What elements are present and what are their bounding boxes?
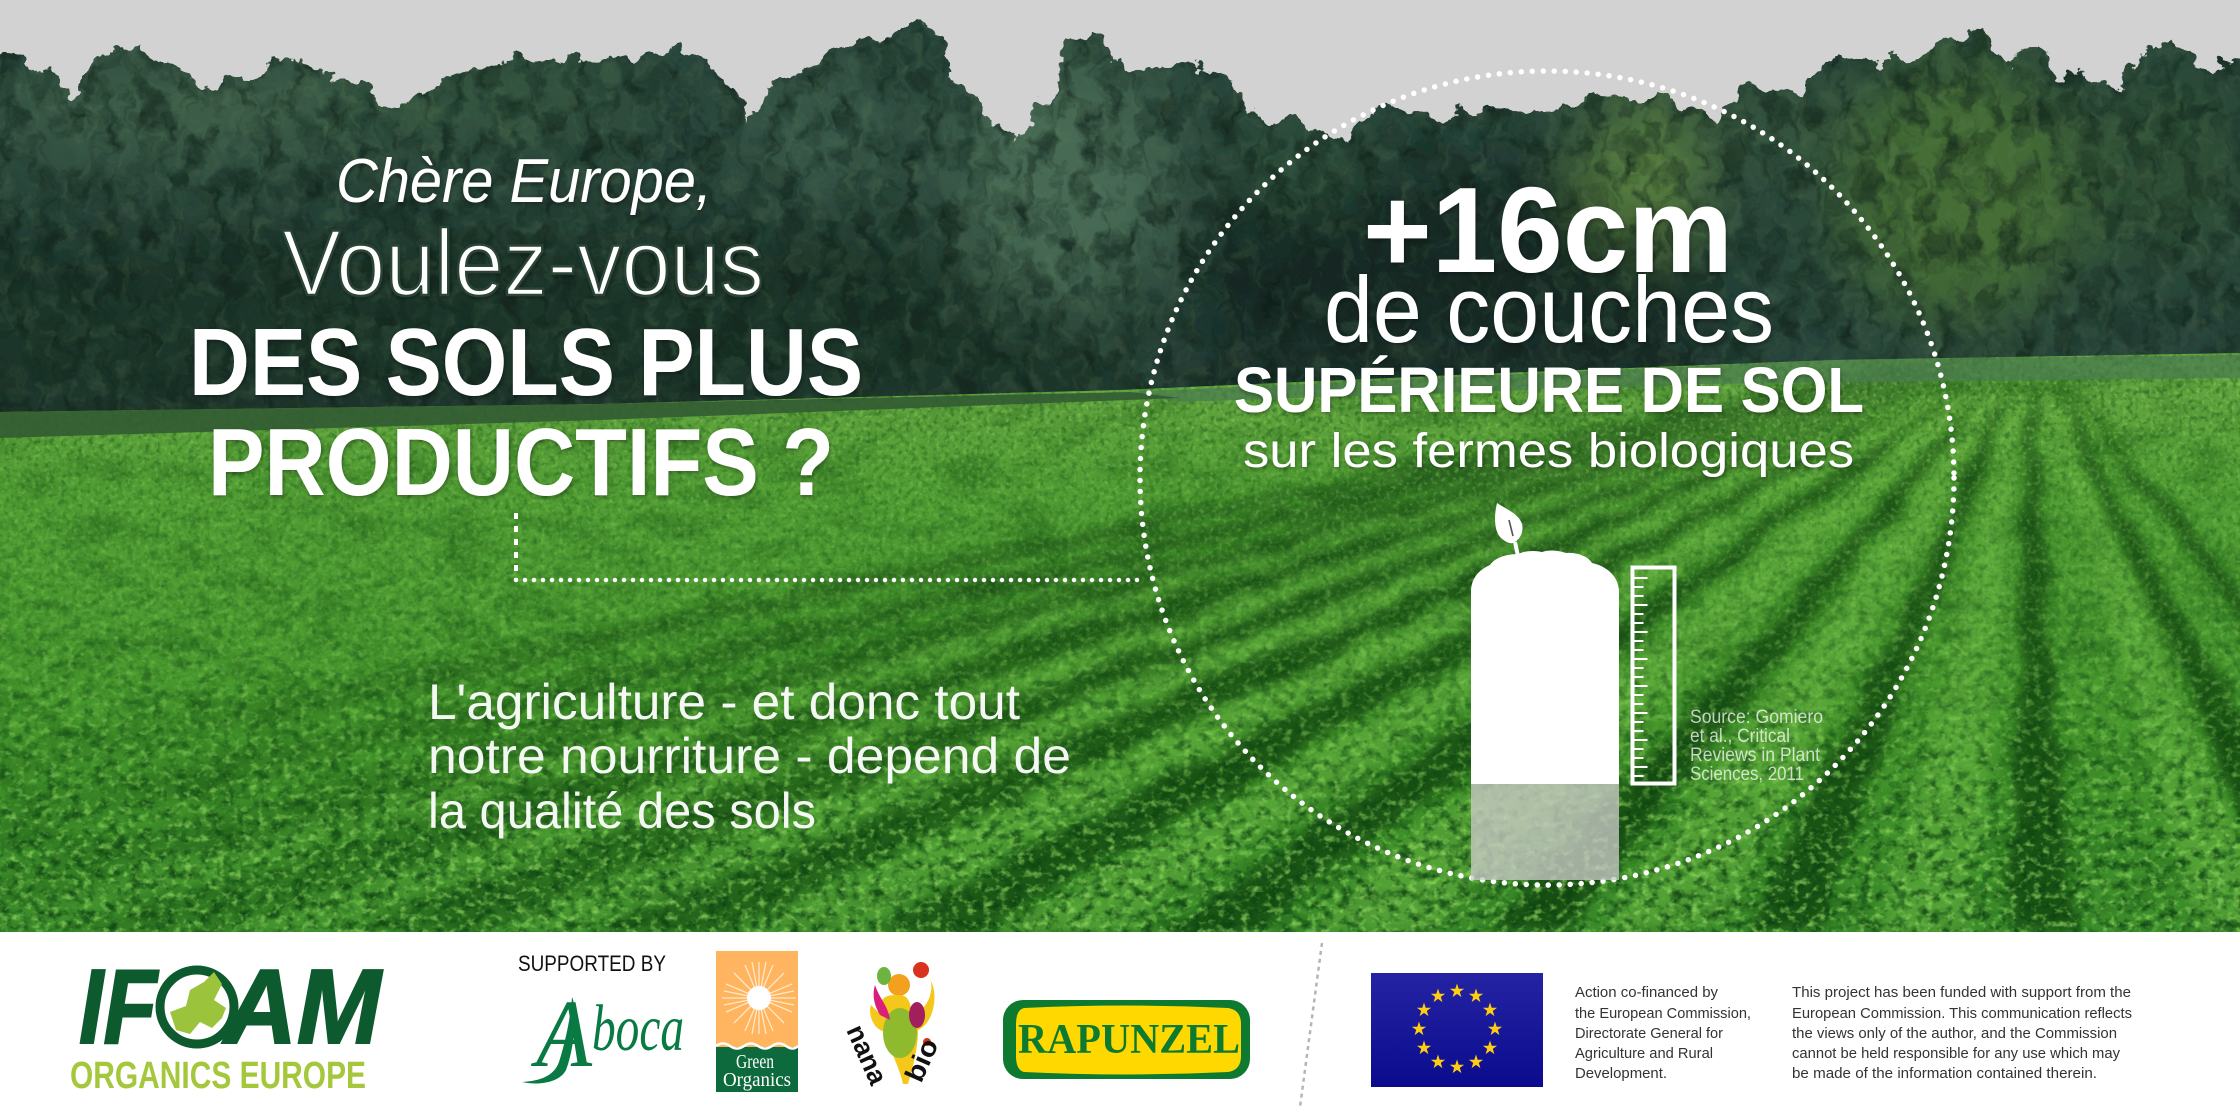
logo: IFOAM Organics Europe: AM xyxy=(221,948,384,1066)
dotted circle xyxy=(1140,71,1954,885)
key statistic text xyxy=(1234,162,1864,478)
logo: Green Organics xyxy=(716,951,798,1092)
source note: Sciences, 2011 xyxy=(1690,764,1804,785)
logo: nana bio: bio xyxy=(899,1034,944,1086)
co-financing note: Action co-financed by xyxy=(1575,984,1718,1001)
logo: IFOAM Organics Europe: IF xyxy=(79,948,160,1066)
logo: nana bio: nana xyxy=(841,1020,894,1090)
key statistic text: SUPÉRIEURE DE SOL xyxy=(1234,354,1864,426)
dashed divider xyxy=(1300,943,1322,1107)
EU flag xyxy=(1371,973,1543,1087)
background: tree line xyxy=(0,19,2240,412)
disclaimer note: European Commission. This communication reflects xyxy=(1792,1005,2132,1022)
logo: Aboca xyxy=(522,980,684,1087)
logo: Rapunzel xyxy=(1003,1000,1250,1079)
logo: Green Organics: Green xyxy=(736,1051,774,1073)
logo: Aboca: A xyxy=(530,980,592,1087)
disclaimer note xyxy=(1792,984,2132,1082)
key statistic text: sur les fermes biologiques xyxy=(1243,425,1854,478)
footer background xyxy=(0,932,2240,1120)
disclaimer note: cannot be held responsible for any use which may xyxy=(1792,1045,2120,1062)
co-financing note: Agriculture and Rural xyxy=(1575,1045,1713,1062)
key statistic text: +16cm xyxy=(1363,162,1733,298)
disclaimer note: the views only of the author, and the Commission xyxy=(1792,1025,2117,1042)
disclaimer note: be made of the information contained therein. xyxy=(1792,1065,2097,1082)
source note: Reviews in Plant xyxy=(1690,745,1821,766)
co-financing note xyxy=(1575,984,1751,1082)
logo: Green Organics: Organics xyxy=(723,1069,791,1091)
paragraph: agriculture: notre nourriture - depend de xyxy=(428,728,1071,784)
dotted connector line xyxy=(516,513,1146,580)
logo: IFOAM Organics Europe xyxy=(70,948,384,1097)
co-financing note: Directorate General for xyxy=(1575,1025,1723,1042)
key statistic text: de couches xyxy=(1324,257,1774,362)
logo: Rapunzel: RAPUNZEL xyxy=(1018,1017,1240,1063)
logo: Aboca: boca xyxy=(592,992,684,1065)
headline: Voulez-vous xyxy=(282,210,764,315)
supported by label: SUPPORTED BY xyxy=(518,951,666,976)
icon: ruler xyxy=(1632,568,1674,784)
paragraph: agriculture xyxy=(428,674,1071,839)
headline: DES SOLS PLUS xyxy=(189,309,863,416)
headline xyxy=(189,147,863,516)
background: crop field with rows xyxy=(0,340,2240,940)
paragraph: agriculture: L'agriculture - et donc tout xyxy=(428,674,1020,730)
icon: candle with leaf xyxy=(1471,503,1619,880)
co-financing note: the European Commission, xyxy=(1575,1005,1751,1022)
headline: PRODUCTIFS ? xyxy=(208,409,834,516)
logo: IFOAM Organics Europe: ORGANICS EUROPE xyxy=(70,1055,366,1097)
logo: nana bio xyxy=(841,962,944,1090)
paragraph: agriculture: la qualité des sols xyxy=(428,783,816,839)
source note: et al., Critical xyxy=(1690,726,1790,747)
source note xyxy=(1690,707,1823,785)
source note: Source: Gomiero xyxy=(1690,707,1823,728)
disclaimer note: This project has been funded with support from the xyxy=(1792,984,2131,1001)
co-financing note: Development. xyxy=(1575,1065,1667,1082)
headline: Chère Europe, xyxy=(336,147,712,216)
